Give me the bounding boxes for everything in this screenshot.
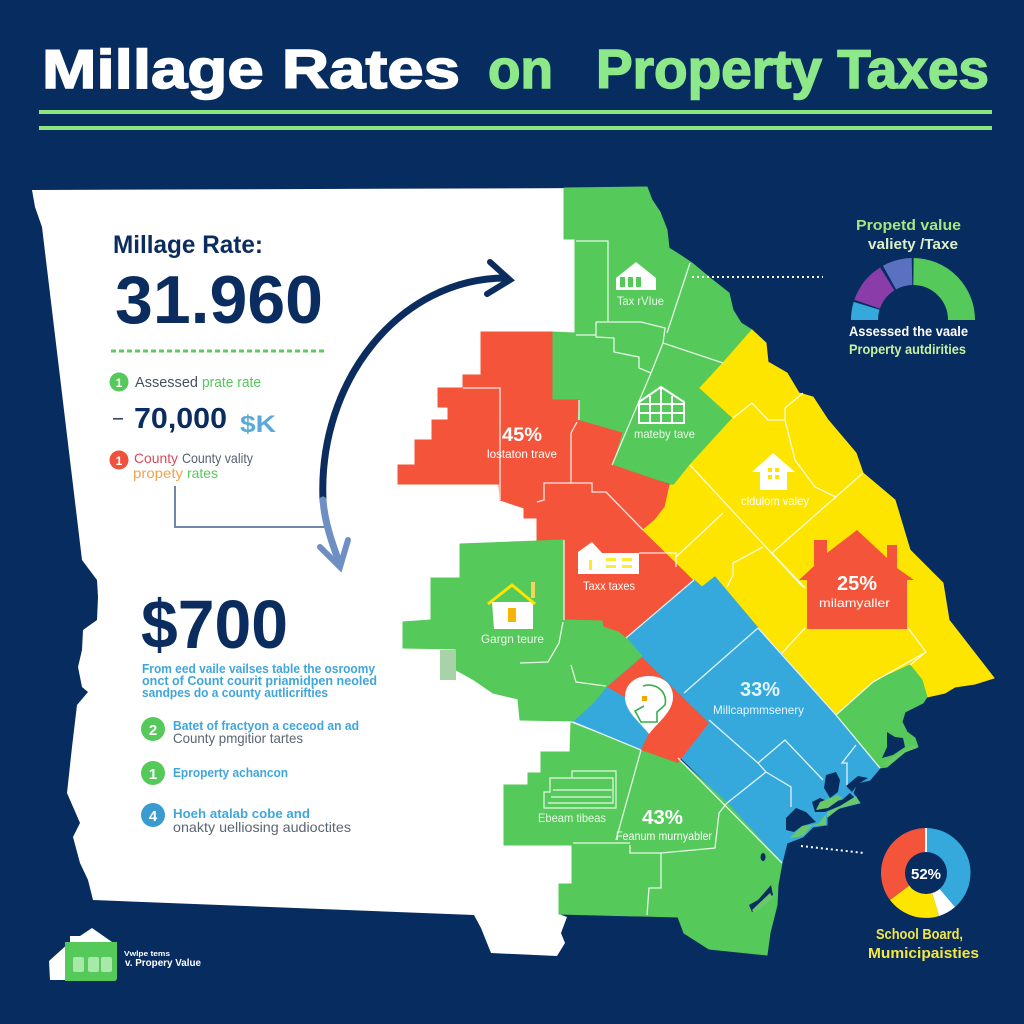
item 1: Eproperty achancon (173, 765, 288, 780)
stat: 43 percent: 43% (642, 807, 683, 829)
item 1 (141, 761, 288, 785)
dotted leader bottom (801, 846, 864, 853)
item 1: 1 (149, 766, 157, 783)
region: green south (504, 723, 782, 955)
item: county rates: rates (187, 465, 218, 481)
red house callout (799, 530, 914, 629)
stat: 45 percent: 45% (502, 425, 542, 446)
label: tax value: Tax rVIue (617, 294, 664, 308)
stat: 45 percent: lostaton trave (487, 447, 557, 461)
item: county rates: County vality (182, 450, 253, 466)
gauge arcs (864, 272, 962, 320)
region: red pin county (607, 657, 709, 763)
donut value: 52% (911, 866, 941, 883)
region: green west (403, 540, 642, 721)
gauge title: Propetd value (856, 217, 961, 234)
red house callout: 25% (837, 573, 877, 595)
logo text (124, 951, 201, 969)
item: county rates: 1 (116, 454, 123, 468)
stat: 33 percent: Millcapmmsenery (713, 703, 804, 717)
coastal islands (749, 732, 917, 913)
item: county rates: County (134, 450, 178, 466)
title: on (488, 38, 553, 100)
stat: 45 percent (487, 425, 557, 461)
donut caption (868, 926, 979, 962)
icon: building, tax value (616, 262, 656, 290)
label: ebeam tibeas: Ebeam tibeas (538, 811, 606, 825)
gauge title: valiety /Taxe (868, 236, 958, 253)
item 2: County pmgitior tartes (173, 730, 303, 746)
icon: house with yellow roof (488, 582, 535, 629)
paragraph: onct of Count courit priamidpen neoled (142, 673, 377, 688)
region: red west (398, 332, 694, 637)
item: assessed rate: prate rate (202, 374, 261, 391)
heading: millage rate: Millage Rate: (113, 231, 263, 259)
paragraph: sandpes do a county autlicrifties (142, 685, 328, 700)
value: 70,000: $K (240, 411, 277, 438)
county borders (463, 241, 926, 915)
map (398, 187, 994, 955)
icon: documents (544, 771, 616, 808)
title (42, 38, 989, 100)
item 4: onakty uelliosing audioctites (173, 819, 351, 835)
item: assessed rate (110, 372, 261, 392)
dotted leader top (692, 276, 823, 278)
paragraph: From eed vaile vailses table the osroomy (142, 661, 376, 676)
dashed divider (111, 350, 327, 352)
item: assessed rate: 1 (116, 376, 123, 390)
gauge chart (856, 217, 962, 320)
item 2: 2 (149, 722, 157, 739)
title: Millage Rates (42, 38, 460, 100)
icon: house on yellow (752, 453, 795, 490)
gauge caption: Assessed the vaale (849, 323, 968, 339)
donut caption: School Board, (876, 926, 963, 943)
gauge caption (849, 323, 968, 357)
value: 70,000: 70,000 (134, 403, 227, 435)
region: green north (552, 187, 752, 485)
label: taxes: Taxx taxes (583, 579, 635, 593)
value: 70,000 (113, 403, 277, 438)
item 4 (141, 803, 351, 835)
item: county rates: propety (133, 465, 183, 481)
icon: warehouse grid (639, 387, 684, 423)
donut chart (881, 828, 971, 918)
red house callout: milamyaller (819, 596, 890, 610)
item: assessed rate: Assessed (135, 374, 198, 391)
title: Property Taxes (596, 38, 989, 100)
icon: location pin (625, 676, 673, 734)
logo: house (49, 928, 117, 981)
logo text: Vwlpe tems (124, 951, 170, 958)
icon: house on red (578, 542, 639, 574)
big number: $700: $700 (141, 586, 288, 663)
region: blue (573, 577, 880, 863)
white state shape (32, 188, 600, 956)
label: gargn teure: Gargn teure (481, 632, 544, 646)
gauge title (856, 217, 961, 253)
donut caption: Mumicipaisties (868, 945, 979, 962)
stat: 33 percent (713, 679, 804, 717)
stat: 43 percent: Feanum murnyabler (616, 829, 712, 843)
label: mately tave: mateby tave (634, 427, 695, 441)
paragraph (142, 661, 377, 700)
curved arrow (320, 262, 510, 567)
item 4: Hoeh atalab cobe and (173, 806, 310, 821)
donut segments (881, 828, 971, 918)
label: cldulom valey: cldulom valey (741, 494, 809, 508)
item: county rates (110, 450, 253, 481)
item 2: Batet of fractyon a ceceod an ad (173, 718, 359, 733)
region: yellow (643, 330, 994, 715)
gauge caption: Property autdirities (849, 341, 966, 357)
big number: 31.960: 31.960 (115, 262, 323, 338)
region: green southeast coast (836, 665, 927, 768)
stat: 43 percent (616, 807, 712, 843)
item 2 (141, 717, 359, 746)
stat: 33 percent: 33% (740, 679, 780, 701)
pale green square (440, 650, 456, 680)
logo text: v. Propery Value (125, 958, 201, 969)
item 4: 4 (149, 808, 158, 825)
connector line (175, 486, 325, 527)
